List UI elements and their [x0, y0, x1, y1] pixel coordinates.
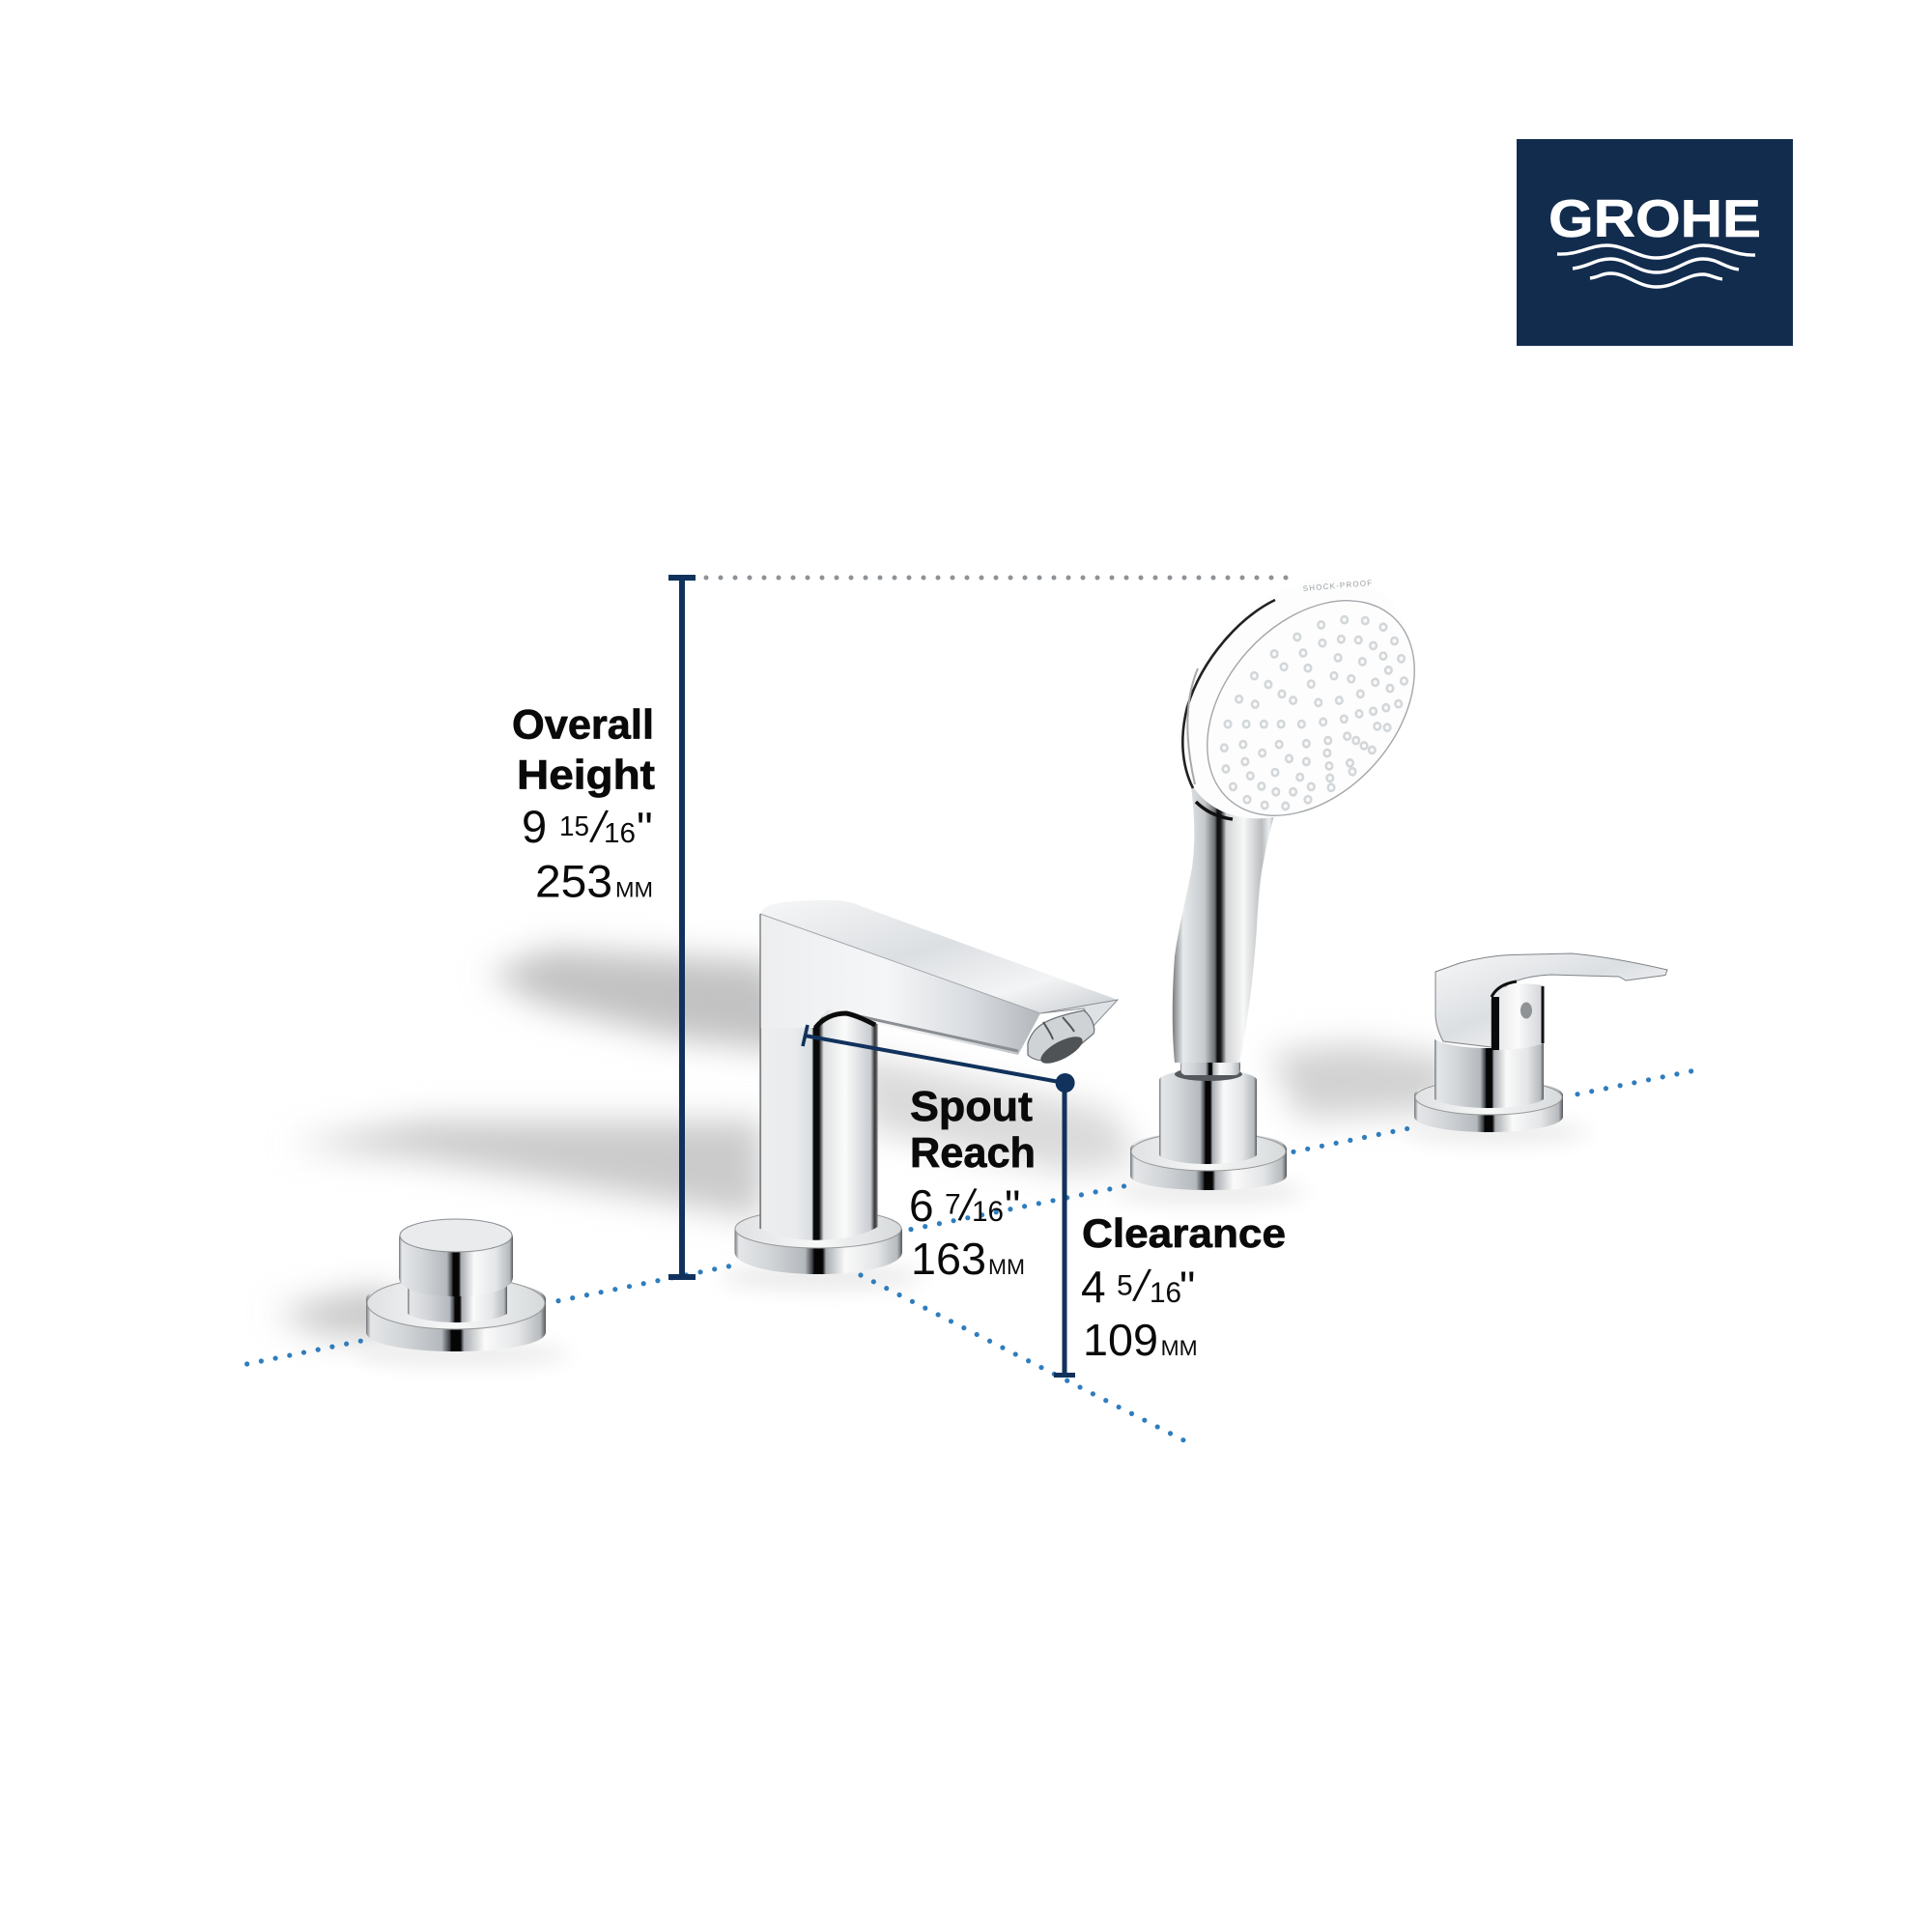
fixture: spout faucet: [734, 900, 1118, 1274]
fixture: pop-up knob: [366, 1219, 546, 1351]
label: spout reach: 6: [909, 1180, 934, 1231]
dimension: overall height bar: [668, 575, 696, 1280]
label: overall height: ": [637, 803, 653, 854]
shower head: [1132, 532, 1459, 865]
label: overall height: [512, 702, 655, 907]
shower nozzles: [1221, 616, 1407, 810]
aerator: [1040, 1000, 1118, 1026]
label: spout reach: /: [955, 1178, 980, 1234]
logo: GROHE: GROHE: [1548, 188, 1761, 248]
label: spout reach: ": [1005, 1180, 1020, 1231]
fixture: hand shower: SHOCK-PROOF: [1302, 579, 1374, 593]
label: spout reach: 16: [972, 1196, 1004, 1228]
label: overall height: 253: [535, 856, 612, 907]
deck line: blue dotted reference lines: [247, 1070, 1696, 1442]
label: overall height: MM: [615, 878, 653, 902]
label: spout reach: 163: [911, 1234, 986, 1284]
spout column: [760, 1005, 878, 1240]
label: spout reach: [909, 1083, 1036, 1284]
dimension: spout reach and clearance lines: [803, 1025, 1075, 1378]
label: clearance: 5: [1117, 1270, 1133, 1302]
label: spout reach: Reach: [910, 1129, 1036, 1177]
label: overall height: Height: [517, 752, 655, 798]
mixer cartridge: [1492, 984, 1544, 1050]
label: clearance: Clearance: [1082, 1210, 1286, 1256]
label: spout reach: MM: [988, 1255, 1025, 1279]
logo: GROHE: [1517, 139, 1793, 346]
overall height top reference: grey dotted line: [706, 576, 1294, 580]
label: clearance: MM: [1161, 1336, 1198, 1360]
label: clearance: 4: [1081, 1262, 1106, 1312]
label: overall height: /: [586, 799, 611, 855]
fixture: hand shower: [1130, 532, 1459, 1190]
label: clearance: 16: [1150, 1277, 1181, 1309]
label: clearance: /: [1129, 1258, 1154, 1314]
label: spout reach: Spout: [910, 1083, 1033, 1130]
label: overall height: 15: [559, 811, 589, 842]
spout top surface: [760, 900, 1118, 1013]
shower handle: [1173, 779, 1280, 1063]
spout side: [760, 914, 1040, 1055]
fixture: lever mixer: [1414, 953, 1667, 1132]
label: overall height: 16: [604, 818, 636, 849]
shower base disc: [1130, 1132, 1287, 1190]
mixer lever: [1435, 953, 1667, 1047]
shower holder: [1159, 1069, 1257, 1164]
label: overall height: 9: [522, 801, 547, 852]
cast shadows: [275, 949, 1589, 1366]
label: overall height: Overall: [512, 702, 654, 749]
label: spout reach: 7: [945, 1189, 961, 1221]
label: clearance: 109: [1083, 1315, 1158, 1365]
label: clearance: ": [1179, 1262, 1195, 1312]
label: clearance: [1081, 1210, 1286, 1365]
